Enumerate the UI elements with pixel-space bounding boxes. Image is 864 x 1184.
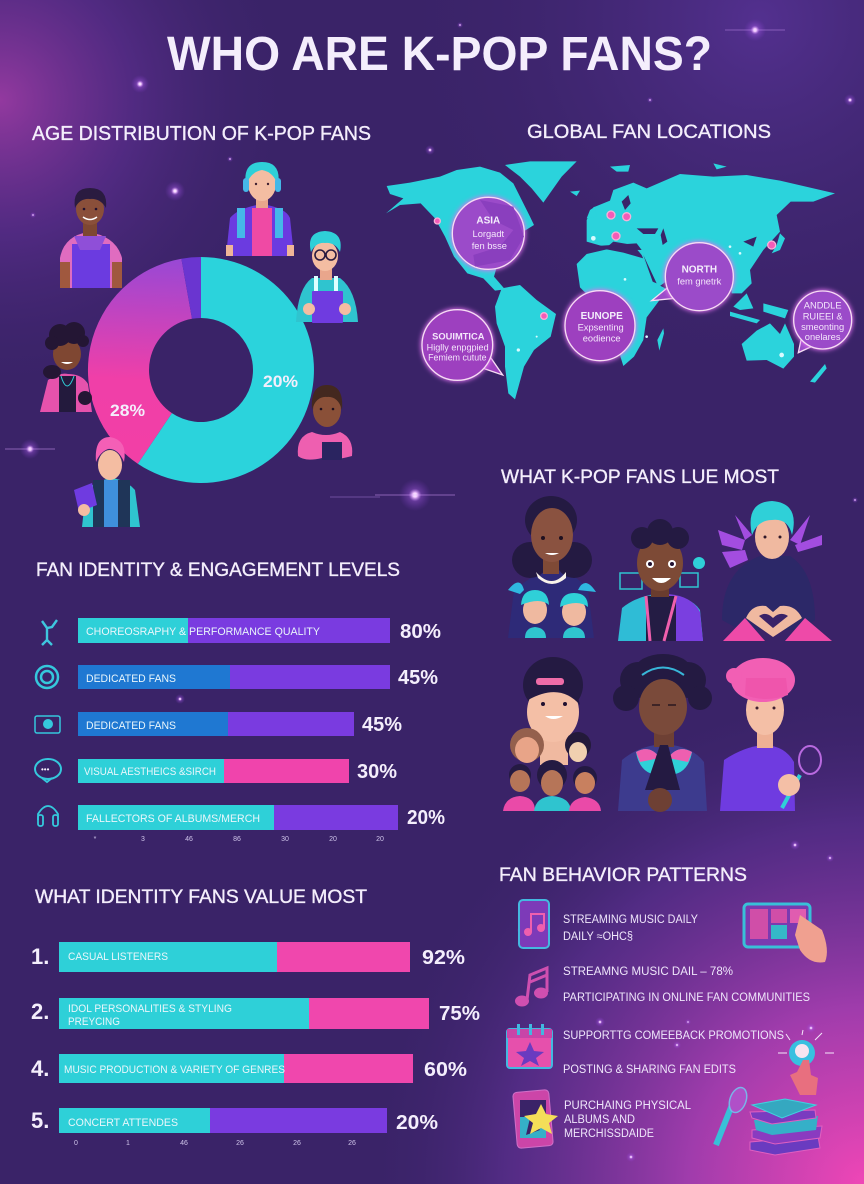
icon: light stick bbox=[716, 1085, 750, 1145]
heading: identity levels: FAN IDENTITY & ENGAGEMENT LEVELS bbox=[36, 560, 400, 581]
bar 4 bbox=[78, 759, 397, 783]
axis: 0 bbox=[74, 1140, 78, 1147]
axis: 1 bbox=[126, 1140, 130, 1147]
icon: calendar with star bbox=[507, 1024, 552, 1068]
icon: fan bottom pink hair bbox=[74, 437, 140, 527]
portrait 5: girl with headphones bbox=[613, 654, 712, 812]
heading: identity values: WHAT IDENTITY FANS VALUE MOST bbox=[35, 887, 367, 908]
bar 1: 80% bbox=[400, 621, 441, 643]
ranked bar 2: 2. bbox=[31, 999, 49, 1024]
bubble: south: Higlly enpgpied bbox=[427, 343, 489, 353]
donut label left: 28% bbox=[110, 401, 145, 420]
bubble: europe: EUNOPE bbox=[581, 311, 623, 322]
icon: camera bbox=[35, 716, 60, 733]
bar 5 bbox=[78, 805, 445, 830]
axis: 20 bbox=[376, 836, 384, 843]
donut slice: cyan bbox=[138, 257, 314, 483]
bubble: south bbox=[421, 308, 503, 382]
axis: 20 bbox=[329, 836, 337, 843]
ranked bar 2: 75% bbox=[439, 1003, 480, 1025]
axis: 26 bbox=[236, 1140, 244, 1147]
title: WHO ARE K-POP FANS? bbox=[167, 28, 712, 81]
bubble: middle: RUIEEI & bbox=[803, 311, 843, 321]
ranked bar 1 bbox=[31, 942, 465, 972]
portrait 3: heart hands bbox=[718, 501, 832, 641]
ranked bar 5: CONCERT ATTENDES bbox=[68, 1117, 178, 1129]
bubble: middle: ANDDLE bbox=[804, 301, 842, 311]
bubble: south: SOUIMTICA bbox=[432, 331, 485, 341]
icon: fan with glasses and tablet bbox=[296, 231, 358, 323]
axis: 30 bbox=[281, 836, 289, 843]
ranked bar 4: 4. bbox=[31, 1056, 49, 1081]
icon: music note bbox=[515, 968, 548, 1006]
axis bbox=[74, 1140, 356, 1147]
donut label right: 20% bbox=[263, 372, 298, 391]
panel: behavior list bbox=[507, 900, 834, 1155]
icon: chat bubble bbox=[35, 759, 61, 782]
bubble: north bbox=[652, 241, 735, 312]
bar 4: 30% bbox=[357, 761, 397, 783]
bubble: europe: Expsenting bbox=[578, 323, 624, 333]
bar 3 bbox=[78, 712, 402, 736]
ranked bar 4 bbox=[31, 1054, 467, 1083]
ranked bar 5: 20% bbox=[396, 1112, 438, 1134]
bar 2: DEDICATED FANS bbox=[86, 673, 176, 685]
bubble: asia: fen bsse bbox=[472, 241, 507, 251]
ranked bar 1: CASUAL LISTENERS bbox=[68, 951, 168, 963]
bubble: europe: eodience bbox=[583, 334, 621, 344]
donut slice: pink bbox=[88, 259, 192, 464]
donut slice: violet bbox=[181, 257, 201, 319]
bar 3: 45% bbox=[362, 714, 402, 736]
icon: tablet with hand bbox=[744, 904, 827, 962]
icon: album stack bbox=[750, 1099, 822, 1155]
ranked bar 2: PREYCING bbox=[68, 1016, 120, 1028]
ranked bar 2: IDOL PERSONALITIES & STYLING bbox=[68, 1003, 232, 1015]
icon: chat bubble: ••• bbox=[41, 765, 50, 774]
behavior text 2: DAILY ≈OHC§ bbox=[563, 931, 633, 943]
bar 1: CHOREOSRAPHY & PERFORMANCE QUALITY bbox=[86, 626, 321, 638]
ranked bar 1: 92% bbox=[422, 947, 465, 969]
behavior text 6: POSTING & SHARING FAN EDITS bbox=[563, 1064, 736, 1076]
ranked bar 4: MUSIC PRODUCTION & VARIETY OF GENRES bbox=[64, 1064, 285, 1076]
panel: ranked bar chart bbox=[31, 942, 480, 1147]
ranked bar 2 bbox=[31, 998, 480, 1029]
ranked bar 4: 60% bbox=[424, 1059, 467, 1081]
icon: fan left curly hair bbox=[40, 322, 92, 412]
behavior text 1: STREAMING MUSIC DAILY bbox=[563, 914, 698, 926]
panel: identity bar chart bbox=[35, 618, 445, 843]
icon: fan top with headphones bbox=[226, 162, 294, 256]
behavior text 5: SUPPORTTG COMEEBACK PROMOTIONS bbox=[563, 1030, 784, 1042]
axis: 46 bbox=[180, 1140, 188, 1147]
panel: fan portraits bbox=[503, 496, 832, 812]
icon: dancer bbox=[42, 620, 57, 645]
bar 2 bbox=[78, 665, 438, 689]
axis: 86 bbox=[233, 836, 241, 843]
bar 4: VISUAL AESTHEICS &SIRCH bbox=[84, 766, 216, 778]
heading: what fans value: WHAT K-POP FANS LUE MOST bbox=[501, 467, 779, 488]
bar 5: FALLECTORS OF ALBUMS/MERCH bbox=[86, 813, 260, 825]
bubble: north: fem gnetrk bbox=[677, 276, 722, 286]
portrait 2: boy with hoodie bbox=[618, 519, 705, 641]
behavior text 8: ALBUMS AND bbox=[564, 1114, 635, 1126]
bubble: asia: ASIA bbox=[476, 216, 500, 227]
axis: 26 bbox=[293, 1140, 301, 1147]
behavior text 7: PURCHAING PHYSICAL bbox=[564, 1100, 692, 1112]
portrait 4: woman with family bbox=[503, 657, 601, 811]
heading: age distribution: AGE DISTRIBUTION OF K-POP FANS bbox=[32, 123, 371, 145]
heading: global fan locations: GLOBAL FAN LOCATIONS bbox=[527, 122, 771, 143]
axis: 46 bbox=[185, 836, 193, 843]
bubble: middle bbox=[792, 290, 853, 353]
map: dots bbox=[517, 236, 784, 357]
panel: world map bbox=[386, 161, 853, 399]
icon: swirl bbox=[36, 666, 58, 688]
behavior text 4: PARTICIPATING IN ONLINE FAN COMMUNITIES bbox=[563, 992, 810, 1004]
bar 5: 20% bbox=[407, 807, 445, 829]
bar 3: DEDICATED FANS bbox=[86, 720, 176, 732]
bubble: middle: onelares bbox=[805, 332, 841, 342]
axis bbox=[94, 836, 384, 843]
icon: fan top left bbox=[60, 188, 122, 288]
icon: tap button bbox=[778, 1030, 834, 1095]
bubble: europe bbox=[564, 289, 636, 362]
icon: phone with music note bbox=[519, 900, 549, 948]
bubble: asia bbox=[451, 196, 526, 271]
axis: 3 bbox=[141, 836, 145, 843]
ranked bar 5 bbox=[31, 1108, 438, 1134]
bubble: asia: Lorgadt bbox=[473, 229, 505, 239]
map: inland seas bbox=[597, 195, 757, 283]
panel: age donut chart bbox=[88, 257, 314, 483]
icon: phone with star bbox=[513, 1090, 558, 1148]
ranked bar 1: 1. bbox=[31, 944, 49, 969]
behavior text 3: STREAMNG MUSIC DAIL – 78% bbox=[563, 966, 733, 978]
map: landmasses bbox=[386, 161, 835, 399]
axis: * bbox=[94, 836, 97, 843]
behavior text 9: MERCHISSDAIDE bbox=[564, 1128, 654, 1140]
bar 1 bbox=[78, 618, 441, 643]
bubble: south: Femiem cutute bbox=[428, 353, 486, 363]
bar 2: 45% bbox=[398, 667, 438, 689]
icon: headphones bbox=[38, 806, 58, 826]
ranked bar 5: 5. bbox=[31, 1108, 49, 1133]
portrait 6: pink hair with light stick bbox=[720, 658, 821, 811]
icon: fan lower right bbox=[298, 385, 352, 460]
portrait 1: girl with kids bbox=[508, 496, 596, 638]
heading: behavior patterns: FAN BEHAVIOR PATTERNS bbox=[499, 865, 747, 886]
bubble: middle: smeonting bbox=[801, 322, 844, 332]
bubble: north: NORTH bbox=[682, 264, 717, 275]
map: pins bbox=[434, 211, 776, 319]
axis: 26 bbox=[348, 1140, 356, 1147]
